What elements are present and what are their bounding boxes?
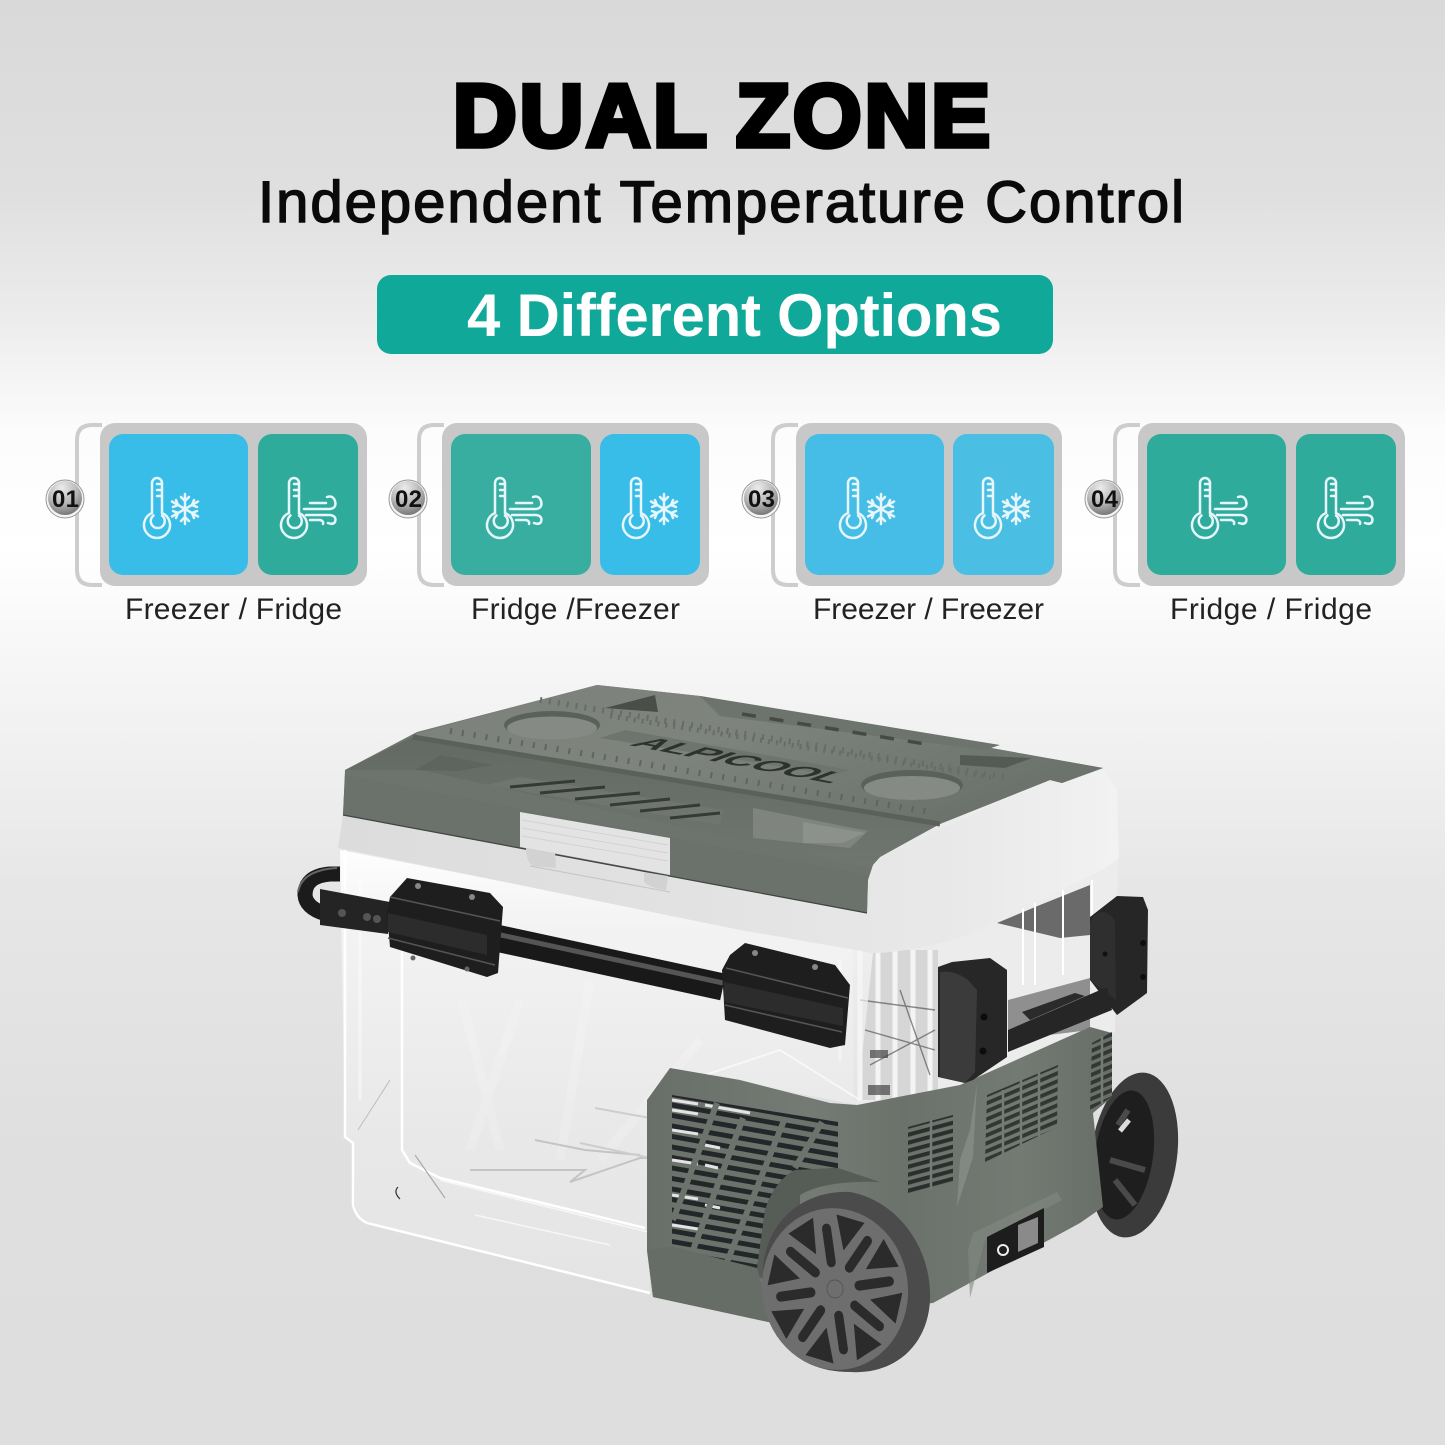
control panel [987, 1208, 1044, 1273]
icon: fridge [1318, 478, 1372, 538]
interior dark parts [853, 880, 1092, 1100]
top plateau [413, 685, 1103, 824]
option 02 [389, 423, 709, 626]
lid white shell [338, 768, 1119, 953]
fridge cell [1296, 434, 1396, 575]
front band [345, 737, 940, 868]
rear slots [742, 714, 925, 744]
banner: 4 different options [377, 275, 1053, 354]
left handle with bar [298, 868, 850, 1048]
option 03 [742, 423, 1062, 626]
cooler illustration [298, 685, 1188, 1379]
front side handle bracket [938, 958, 1007, 1083]
badge 04 [1085, 480, 1123, 518]
badge 01 [46, 480, 84, 518]
icon: fridge [1192, 478, 1246, 538]
front wheel [752, 1192, 930, 1379]
base unit [647, 1027, 1112, 1323]
icon: freezer [623, 478, 677, 538]
freezer cell [953, 434, 1054, 575]
badge 03: 03 [748, 486, 775, 513]
logo recess [600, 730, 850, 775]
left clamp [387, 878, 503, 977]
option 04 [1085, 423, 1405, 626]
label: Freezer / Freezer [813, 593, 1044, 626]
recess left [415, 755, 493, 771]
title: DUAL ZONE [453, 66, 990, 165]
lid grey top [343, 685, 1103, 913]
right clamp [722, 943, 850, 1048]
rear side handle [1008, 896, 1148, 1052]
badge 04: 04 [1091, 486, 1119, 513]
wheel slots [759, 1207, 911, 1371]
bar [487, 932, 723, 987]
latch [520, 812, 670, 892]
subtitle: Independent Temperature Control [258, 170, 1184, 235]
logo: ALPICOOL [621, 734, 860, 786]
clear body: side [857, 858, 1118, 1105]
badge 02 [389, 480, 427, 518]
badge 03 [742, 480, 780, 518]
vents [908, 1115, 953, 1195]
freezer cell [600, 434, 700, 575]
icon: fridge [281, 478, 335, 538]
rear recess [605, 695, 658, 712]
bottom chamfer [647, 1247, 773, 1323]
option 01 [46, 423, 367, 626]
icon: freezer [840, 478, 894, 538]
label: Freezer / Fridge [125, 593, 342, 626]
freezer cell [109, 434, 248, 575]
fridge cell [451, 434, 591, 575]
glass inner lines [345, 850, 860, 1293]
icon: freezer [975, 478, 1029, 538]
grille [672, 1095, 838, 1268]
badge 02: 02 [395, 486, 422, 513]
hatch [487, 777, 723, 825]
banner: 4 different options: 4 Different Options [467, 282, 1002, 349]
fridge cell [1147, 434, 1286, 575]
clear body: front [340, 850, 873, 1293]
icon: freezer [144, 478, 198, 538]
label: Fridge / Fridge [1170, 593, 1372, 626]
wheel arch [752, 1168, 880, 1290]
rear wheel [1080, 1067, 1188, 1243]
facet highlights [957, 1083, 977, 1207]
label: Fridge /Freezer [471, 593, 680, 626]
fridge cell [258, 434, 358, 575]
front recess right [753, 808, 868, 848]
dash rows [450, 731, 930, 812]
badge 01: 01 [52, 486, 79, 513]
icon: fridge [487, 478, 541, 538]
cup holders [504, 711, 600, 739]
freezer cell [805, 434, 944, 575]
